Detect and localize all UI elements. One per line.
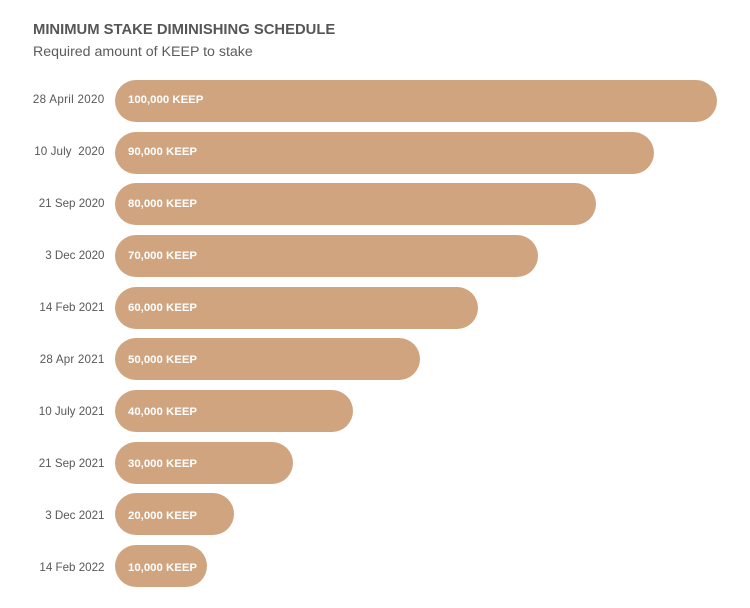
row: 3 Dec 2020: 70,000 KEEP xyxy=(128,250,197,262)
row: 28 April 2020: 28 April 2020 xyxy=(33,93,104,106)
row: 21 Sep 2021: 30,000 KEEP xyxy=(128,458,197,470)
row: 21 Sep 2020: 21 Sep 2020 xyxy=(39,197,104,210)
row: 28 April 2020: 100,000 KEEP xyxy=(128,94,203,106)
row: 3 Dec 2020: 3 Dec 2020 xyxy=(45,249,104,262)
title: MINIMUM STAKE DIMINISHING SCHEDULE xyxy=(33,22,335,38)
row: 21 Sep 2020 xyxy=(39,183,596,225)
row: 21 Sep 2020: 80,000 KEEP xyxy=(128,198,197,210)
row: 21 Sep 2021: 21 Sep 2021 xyxy=(39,457,104,470)
row: 10 July 2020: 10 July 2020 xyxy=(34,145,104,158)
row: 3 Dec 2021: 3 Dec 2021 xyxy=(45,509,104,522)
row: 14 Feb 2022: 14 Feb 2022 xyxy=(39,561,104,574)
row: 3 Dec 2021: 20,000 KEEP xyxy=(128,510,197,522)
subtitle: Required amount of KEEP to stake xyxy=(33,44,253,60)
row: 10 July 2021: 10 July 2021 xyxy=(39,405,104,418)
row: 3 Dec 2021 xyxy=(45,493,234,535)
row: 10 July 2020: 90,000 KEEP xyxy=(128,146,197,158)
row: 21 Sep 2021 xyxy=(39,442,293,484)
row: 28 Apr 2021 xyxy=(40,338,420,380)
row: 14 Feb 2021: 60,000 KEEP xyxy=(128,302,197,314)
row: 28 April 2020 xyxy=(33,80,717,122)
row: 3 Dec 2020 xyxy=(45,235,538,277)
row: 14 Feb 2022: 10,000 KEEP xyxy=(128,562,197,574)
row: 28 Apr 2021: 28 Apr 2021 xyxy=(40,353,104,366)
row: 14 Feb 2022 xyxy=(39,545,207,587)
row: 10 July 2021 xyxy=(39,390,353,432)
row: 10 July 2020 xyxy=(34,132,654,174)
row: 14 Feb 2021: 14 Feb 2021 xyxy=(39,301,104,314)
row: 14 Feb 2021 xyxy=(39,287,478,329)
row: 10 July 2021: 40,000 KEEP xyxy=(128,406,197,418)
row: 28 Apr 2021: 50,000 KEEP xyxy=(128,354,197,366)
